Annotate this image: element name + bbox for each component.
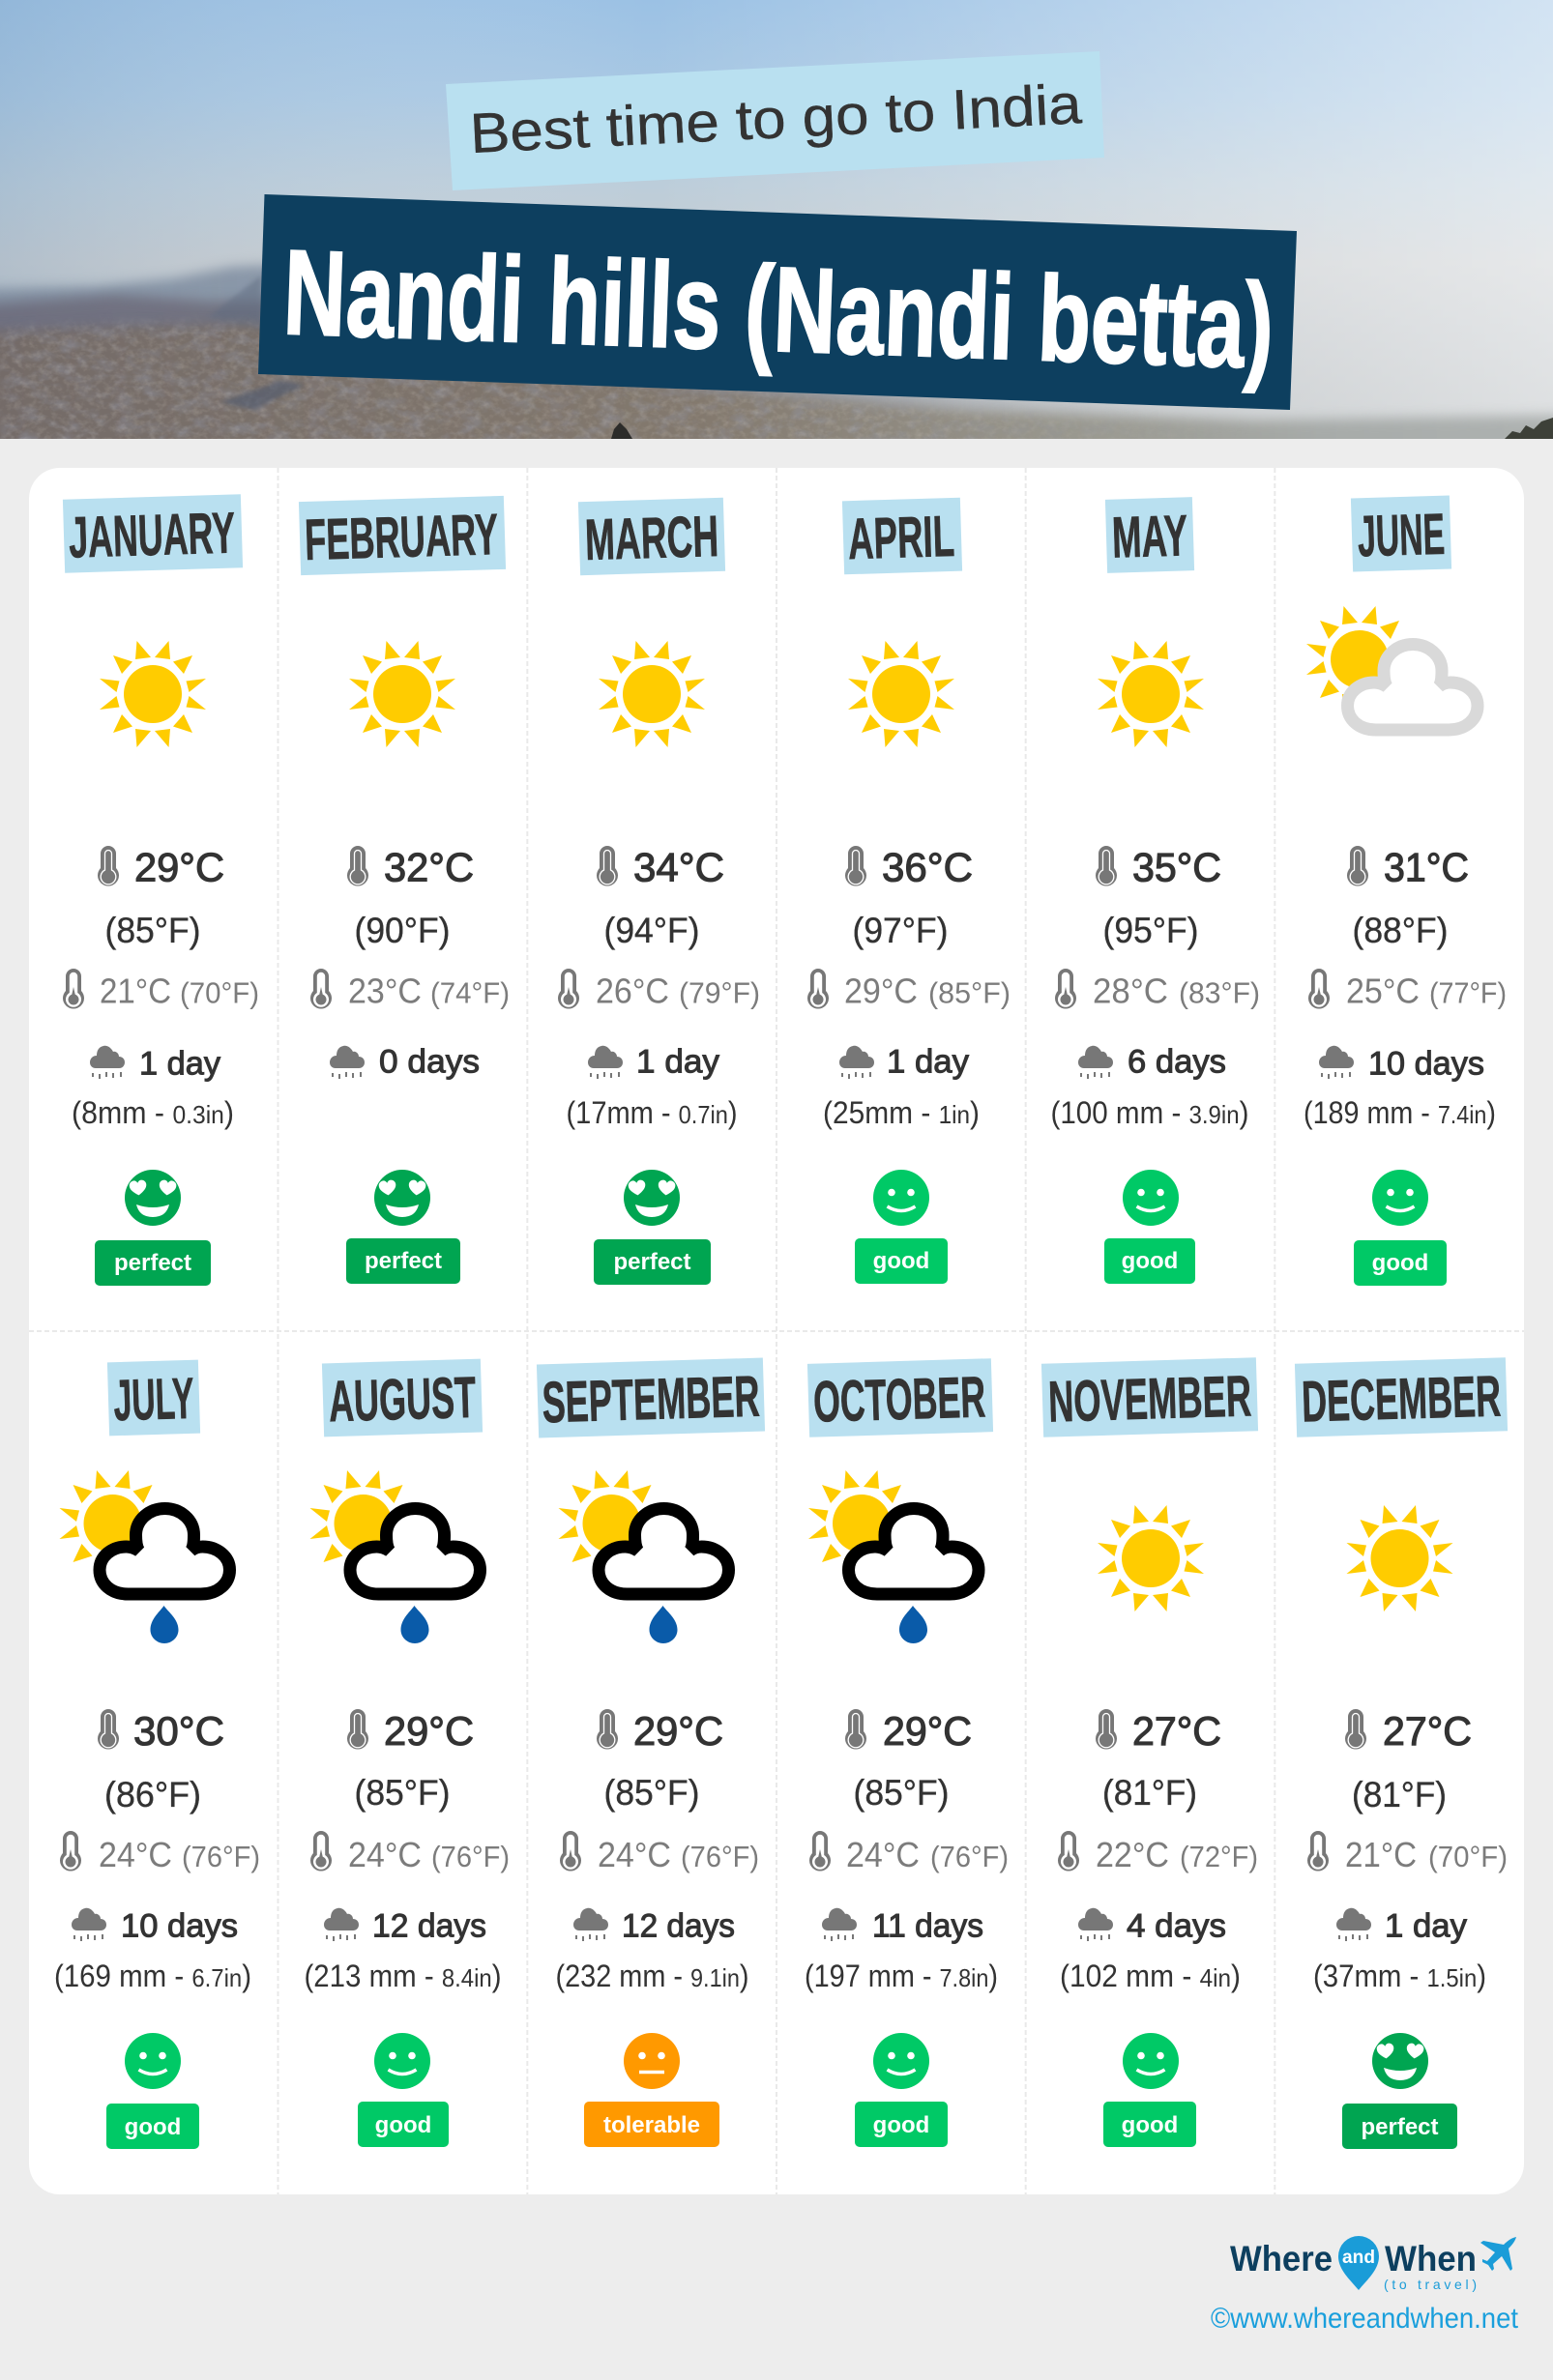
low temperature: 21°C bbox=[1345, 1835, 1417, 1874]
panel: May bbox=[1050, 497, 1260, 1284]
low temperature: (77°F) bbox=[1429, 976, 1507, 1009]
rating face bbox=[873, 1170, 929, 1226]
rainy days bbox=[839, 1044, 969, 1081]
low temperature bbox=[310, 969, 510, 1011]
rating badge: good bbox=[1122, 2112, 1178, 2138]
rating badge bbox=[855, 2102, 948, 2147]
low temperature: (76°F) bbox=[681, 1840, 759, 1873]
low temperature: (76°F) bbox=[431, 1840, 510, 1873]
rainy days: 1 day bbox=[139, 1046, 220, 1083]
high temperature: 35°C bbox=[1132, 845, 1221, 889]
low temperature: 24°C bbox=[598, 1835, 671, 1874]
panel: August bbox=[304, 1359, 510, 2147]
rating face bbox=[125, 1170, 181, 1226]
rainy days bbox=[330, 1044, 480, 1081]
icon: high temperature bbox=[845, 846, 866, 886]
icon: sun bbox=[1098, 1505, 1204, 1611]
month label: JUNE bbox=[1357, 502, 1446, 568]
panel: monthly calendar card bbox=[29, 468, 1524, 2194]
high temperature: 31°C bbox=[1384, 845, 1469, 889]
low temperature: (70°F) bbox=[1428, 1840, 1508, 1873]
logo: Where and When: When bbox=[1385, 2239, 1477, 2278]
low temperature: 29°C bbox=[844, 971, 918, 1011]
rating badge bbox=[855, 1238, 948, 1284]
month label: JULY bbox=[113, 1366, 195, 1433]
rainfall amount: (102 mm - 4in) bbox=[1060, 1959, 1241, 1993]
high temperature: 27°C bbox=[1383, 1708, 1472, 1754]
rainy days: 1 day bbox=[887, 1044, 969, 1081]
icon: high temperature bbox=[1096, 1709, 1117, 1750]
high temperature: 30°C bbox=[133, 1708, 224, 1754]
month label: NOVEMBER bbox=[1047, 1363, 1252, 1435]
rating badge bbox=[346, 1238, 460, 1284]
high temperature: 36°C bbox=[882, 845, 973, 889]
rating badge bbox=[594, 1239, 711, 1285]
rating badge: good bbox=[873, 2112, 929, 2138]
high temperature fahrenheit: (81°F) bbox=[1352, 1775, 1447, 1814]
high temperature: 29°C bbox=[883, 1708, 972, 1754]
rating badge bbox=[1103, 2102, 1196, 2147]
logo: Where and When bbox=[1230, 2236, 1516, 2292]
rainy days bbox=[1336, 1908, 1467, 1945]
rating face bbox=[1123, 1170, 1179, 1226]
panel: January bbox=[63, 494, 259, 1286]
high temperature fahrenheit: (81°F) bbox=[1102, 1773, 1197, 1813]
rating face bbox=[125, 2033, 181, 2089]
rainfall amount: (17mm - 0.7in) bbox=[567, 1095, 737, 1130]
rating badge bbox=[95, 1240, 211, 1286]
rating face bbox=[374, 2033, 430, 2089]
month label bbox=[1351, 496, 1451, 571]
low temperature: 26°C bbox=[596, 971, 669, 1011]
low temperature bbox=[560, 1831, 759, 1874]
low temperature: 24°C bbox=[99, 1835, 172, 1874]
header photo: hazy hills bbox=[0, 0, 1553, 464]
panel: February bbox=[299, 496, 510, 1284]
month label: OCTOBER bbox=[812, 1364, 986, 1435]
low temperature: (79°F) bbox=[679, 976, 760, 1009]
high temperature fahrenheit: (85°F) bbox=[853, 1773, 950, 1813]
rating badge: perfect bbox=[365, 1248, 442, 1274]
low temperature bbox=[60, 1831, 260, 1874]
icon: sun bbox=[1346, 1505, 1452, 1611]
icon: sun bbox=[100, 641, 206, 747]
low temperature: 23°C bbox=[348, 971, 422, 1011]
logo: Where and When: (to travel) bbox=[1384, 2277, 1477, 2292]
subtitle banner bbox=[446, 51, 1104, 190]
icon: sun behind cloud bbox=[1306, 606, 1478, 730]
icon: high temperature bbox=[845, 1709, 866, 1750]
rainy days: 10 days bbox=[121, 1908, 238, 1945]
low temperature bbox=[63, 969, 259, 1011]
rating face bbox=[624, 1170, 680, 1226]
month label bbox=[842, 498, 962, 574]
low temperature: (70°F) bbox=[180, 976, 259, 1009]
icon: high temperature bbox=[1096, 846, 1117, 886]
logo: Where and When: Where bbox=[1230, 2239, 1333, 2278]
panel: November bbox=[1041, 1357, 1258, 2147]
low temperature bbox=[310, 1831, 510, 1874]
icon: high temperature bbox=[1345, 1709, 1366, 1750]
high temperature fahrenheit: (85°F) bbox=[104, 911, 201, 950]
month label: FEBRUARY bbox=[304, 502, 499, 572]
rainy days: 4 days bbox=[1127, 1908, 1226, 1945]
high temperature fahrenheit: (94°F) bbox=[603, 911, 700, 950]
rating badge: tolerable bbox=[603, 2112, 700, 2138]
month label bbox=[537, 1358, 765, 1437]
rainy days: 12 days bbox=[372, 1908, 486, 1945]
low temperature: 21°C bbox=[100, 971, 171, 1011]
month label bbox=[107, 1360, 200, 1436]
month label bbox=[299, 496, 506, 575]
rating badge bbox=[1104, 1238, 1195, 1284]
low temperature: (72°F) bbox=[1180, 1840, 1258, 1873]
icon: sun, cloud and rain drop bbox=[559, 1470, 729, 1643]
icon: sun bbox=[848, 641, 954, 747]
month label bbox=[63, 494, 243, 573]
rating face bbox=[624, 2033, 680, 2089]
rainy days bbox=[90, 1046, 220, 1083]
rating badge: good bbox=[375, 2112, 431, 2138]
rainy days bbox=[324, 1908, 486, 1945]
rating badge bbox=[1354, 1240, 1447, 1286]
icon: sun, cloud and rain drop bbox=[60, 1470, 230, 1643]
rating badge: good bbox=[125, 2114, 181, 2140]
high temperature: 29°C bbox=[134, 845, 224, 889]
rating badge bbox=[106, 2104, 199, 2149]
rainfall amount: (37mm - 1.5in) bbox=[1313, 1959, 1486, 1993]
low temperature: 28°C bbox=[1093, 971, 1168, 1011]
rating face bbox=[374, 1170, 430, 1226]
rainy days bbox=[573, 1908, 735, 1945]
rainy days: 1 day bbox=[636, 1044, 719, 1081]
low temperature bbox=[558, 969, 760, 1011]
low temperature bbox=[1058, 1831, 1258, 1874]
low temperature: (85°F) bbox=[928, 976, 1011, 1009]
rating face bbox=[1123, 2033, 1179, 2089]
panel: July bbox=[54, 1360, 260, 2149]
rainfall amount: (100 mm - 3.9in) bbox=[1050, 1095, 1249, 1130]
panel: September bbox=[537, 1358, 765, 2147]
website credit: ©www.whereandwhen.net bbox=[1211, 2303, 1519, 2335]
icon: sun, cloud and rain drop bbox=[309, 1470, 480, 1643]
month label: APRIL bbox=[847, 504, 955, 571]
icon: sun bbox=[1098, 641, 1204, 747]
month label: MAY bbox=[1111, 503, 1188, 570]
rainy days bbox=[1078, 1908, 1226, 1945]
rating badge: perfect bbox=[114, 1250, 191, 1276]
icon: sun bbox=[599, 641, 705, 747]
rating badge: good bbox=[1122, 1248, 1178, 1274]
rainfall amount: (25mm - 1in) bbox=[823, 1095, 980, 1130]
icon: high temperature bbox=[597, 1709, 618, 1750]
low temperature bbox=[807, 969, 1011, 1011]
low temperature: 25°C bbox=[1346, 971, 1420, 1011]
rainy days bbox=[588, 1044, 719, 1081]
low temperature: (76°F) bbox=[930, 1840, 1009, 1873]
high temperature fahrenheit: (95°F) bbox=[1102, 911, 1199, 950]
icon: map pin bbox=[1338, 2236, 1379, 2290]
high temperature fahrenheit: (90°F) bbox=[354, 911, 451, 950]
high temperature fahrenheit: (86°F) bbox=[104, 1775, 201, 1814]
high temperature fahrenheit: (85°F) bbox=[354, 1773, 451, 1813]
rainy days: 12 days bbox=[622, 1908, 735, 1945]
high temperature: 27°C bbox=[1132, 1708, 1221, 1754]
month label: SEPTEMBER bbox=[542, 1364, 760, 1435]
rating face bbox=[1372, 1170, 1428, 1226]
high temperature fahrenheit: (88°F) bbox=[1352, 911, 1449, 950]
icon: plane bbox=[1480, 2237, 1516, 2271]
subtitle text: Best time to go to India bbox=[468, 73, 1084, 165]
panel: March bbox=[558, 498, 760, 1285]
rating badge bbox=[1342, 2104, 1457, 2149]
low temperature: 24°C bbox=[846, 1835, 920, 1874]
icon: sun, cloud and rain drop bbox=[808, 1470, 979, 1643]
rating badge: good bbox=[873, 1248, 929, 1274]
low temperature bbox=[809, 1831, 1009, 1874]
rainy days bbox=[822, 1908, 983, 1945]
rainy days: 10 days bbox=[1368, 1046, 1484, 1083]
icon: high temperature bbox=[347, 1709, 368, 1750]
rainfall amount: (8mm - 0.3in) bbox=[72, 1095, 234, 1130]
rainy days: 6 days bbox=[1128, 1044, 1226, 1081]
high temperature: 34°C bbox=[633, 845, 724, 889]
low temperature: (74°F) bbox=[430, 976, 510, 1009]
low temperature: 24°C bbox=[348, 1835, 422, 1874]
high temperature fahrenheit: (97°F) bbox=[853, 911, 948, 950]
icon: high temperature bbox=[597, 846, 618, 886]
rating badge: perfect bbox=[1361, 2114, 1439, 2140]
low temperature bbox=[1308, 969, 1507, 1011]
rating badge bbox=[358, 2102, 449, 2147]
high temperature: 32°C bbox=[384, 845, 474, 889]
low temperature: (76°F) bbox=[182, 1840, 260, 1873]
icon: high temperature bbox=[347, 846, 368, 886]
panel: December bbox=[1295, 1357, 1508, 2149]
icon: sun bbox=[349, 641, 455, 747]
rainy days: 0 days bbox=[379, 1044, 480, 1081]
panel: April bbox=[807, 498, 1011, 1284]
logo: Where and When: and bbox=[1342, 2248, 1375, 2268]
rating face bbox=[1372, 2033, 1428, 2089]
month label: AUGUST bbox=[328, 1365, 477, 1434]
rainfall amount: (197 mm - 7.8in) bbox=[805, 1959, 998, 1993]
rainy days: 11 days bbox=[872, 1908, 983, 1945]
rating face bbox=[873, 2033, 929, 2089]
icon: high temperature bbox=[98, 846, 119, 886]
rating badge: perfect bbox=[613, 1249, 691, 1275]
low temperature: (83°F) bbox=[1179, 976, 1260, 1009]
month label: JANUARY bbox=[68, 500, 236, 570]
rainfall amount: (213 mm - 8.4in) bbox=[304, 1959, 501, 1993]
low temperature: 22°C bbox=[1096, 1835, 1169, 1874]
panel: October bbox=[805, 1358, 1009, 2147]
month label bbox=[578, 498, 725, 575]
rainfall amount: (169 mm - 6.7in) bbox=[54, 1959, 251, 1993]
rainfall amount: (189 mm - 7.4in) bbox=[1304, 1095, 1496, 1130]
high temperature: 29°C bbox=[633, 1708, 723, 1754]
rainfall amount: (232 mm - 9.1in) bbox=[555, 1959, 749, 1993]
high temperature fahrenheit: (85°F) bbox=[603, 1773, 700, 1813]
rainy days bbox=[72, 1908, 238, 1945]
rainy days bbox=[1078, 1044, 1226, 1081]
month label bbox=[322, 1359, 483, 1437]
month label: MARCH bbox=[584, 504, 719, 572]
low temperature bbox=[1307, 1831, 1508, 1874]
rainy days: 1 day bbox=[1385, 1908, 1467, 1945]
high temperature: 29°C bbox=[384, 1708, 474, 1754]
title banner bbox=[258, 194, 1297, 410]
rainy days bbox=[1319, 1046, 1484, 1083]
icon: high temperature bbox=[98, 1709, 119, 1750]
icon: high temperature bbox=[1347, 846, 1368, 886]
month label bbox=[807, 1358, 993, 1437]
low temperature bbox=[1055, 969, 1260, 1011]
month label bbox=[1041, 1357, 1258, 1437]
rating badge: good bbox=[1372, 1250, 1428, 1276]
panel: June bbox=[1304, 496, 1507, 1286]
month label bbox=[1105, 497, 1194, 573]
rating badge bbox=[584, 2102, 719, 2147]
